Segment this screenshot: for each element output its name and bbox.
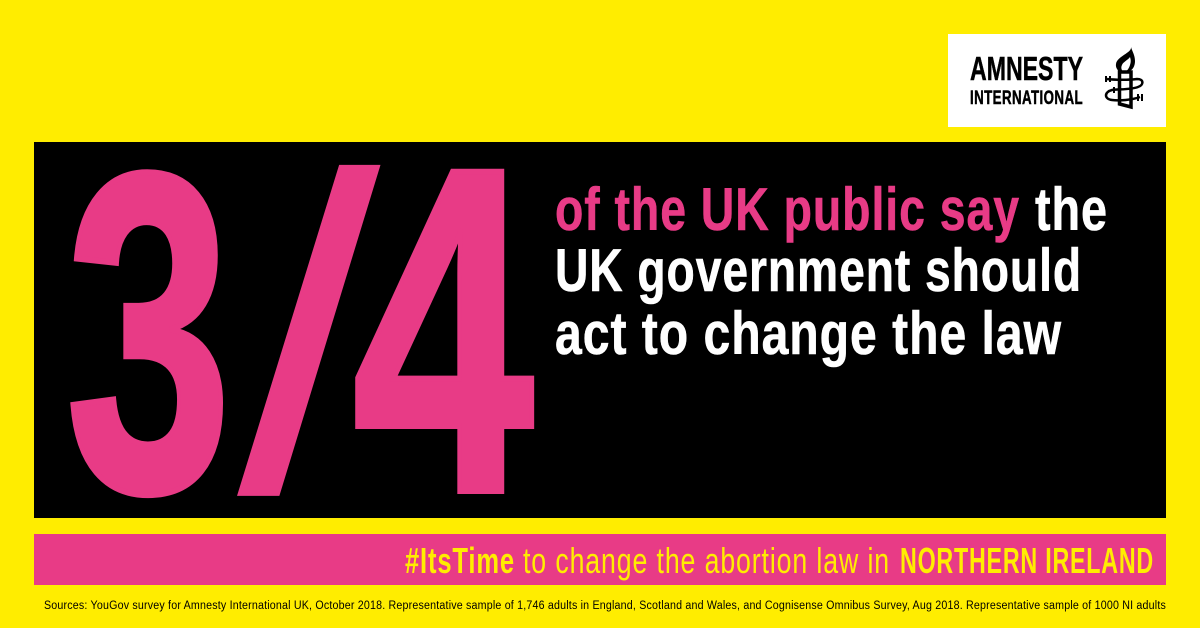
logo wordmark: AMNESTY — [970, 50, 1083, 87]
logo wordmark: INTERNATIONAL — [970, 87, 1083, 109]
big statistic 3/4 — [66, 71, 536, 589]
panel: logo — [948, 34, 1166, 127]
headline text: of the UK public say — [555, 176, 1020, 243]
banner text — [405, 540, 1154, 581]
big statistic 3/4: / — [238, 85, 381, 586]
panel: pink banner — [34, 534, 1166, 585]
banner text: to change the abortion law in — [523, 540, 890, 581]
big statistic 3/4: 4 — [352, 71, 536, 589]
headline text: act to change the law — [555, 300, 1062, 367]
icon: candle in barbed wire — [1106, 47, 1142, 107]
logo wordmark — [970, 50, 1083, 109]
headline text: the — [1035, 176, 1108, 243]
headline text — [555, 176, 1108, 367]
panel: main black panel — [34, 71, 1166, 589]
big statistic 3/4: 3 — [66, 79, 232, 587]
banner text: #ItsTime — [405, 540, 515, 581]
